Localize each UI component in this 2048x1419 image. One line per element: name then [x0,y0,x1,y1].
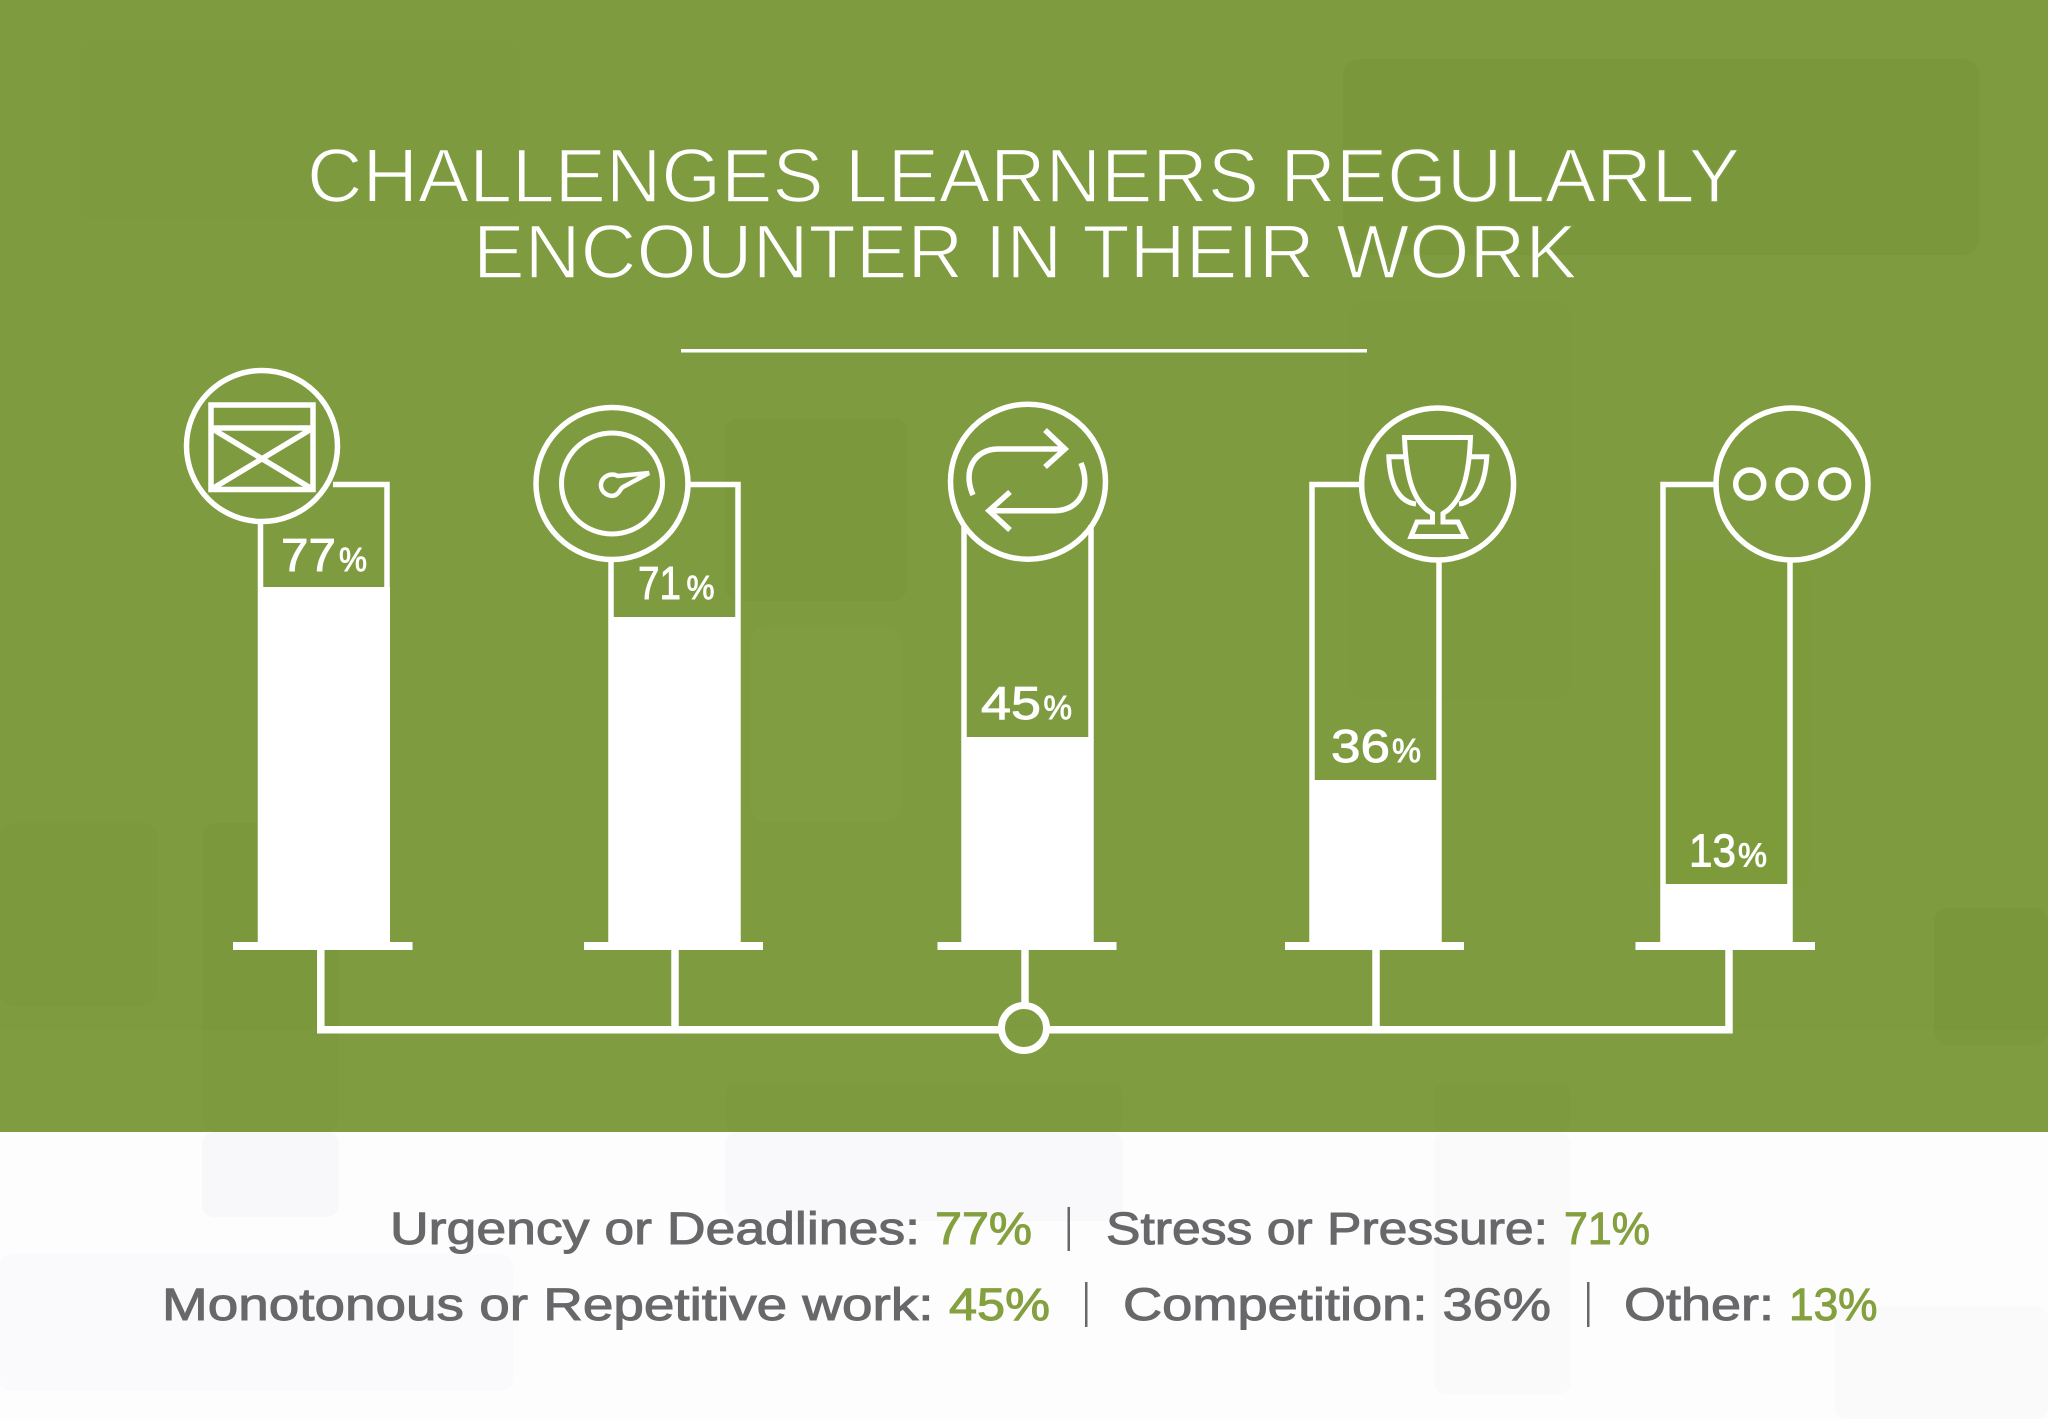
green background panel [0,0,2048,1132]
value: 36%: 36 [1331,720,1390,772]
value: 71% [638,557,714,609]
value: 36% [1331,720,1421,772]
bar: competition 36% [1285,484,1464,950]
icon: three dots [1716,408,1868,560]
legend line 2: Competition: 36% [1123,1279,1551,1330]
connector lines joining the bars [321,950,1729,1030]
legend line 2: Monotonous or Repetitive work: [162,1279,933,1330]
icon: gauge [536,408,688,560]
title divider [681,349,1367,352]
value: 13%: 13 [1689,824,1736,876]
bar: monotonous or repetitive work 45% [938,525,1116,950]
legend line 1: 77% [935,1203,1032,1254]
value: 45%: 45 [981,677,1041,729]
value: 13% [1689,824,1767,876]
value: 13%: % [1738,836,1767,874]
icon: trophy [1362,408,1514,560]
legend line 2 [162,1279,1878,1330]
title [307,134,1740,295]
value: 36%: % [1392,732,1421,769]
value: 77%: 77 [281,529,336,581]
legend line 2: 13% [1789,1279,1878,1330]
legend line 2: Other: [1624,1279,1774,1330]
white background patches [0,1132,2048,1419]
bar: urgency or deadlines 77% [233,484,412,950]
legend line 1: 71% [1564,1203,1650,1254]
title: ENCOUNTER IN THEIR WORK [473,210,1577,295]
value: 71%: 71 [638,557,681,609]
connector hub circle [1002,1006,1046,1050]
bar: stress or pressure 71% [584,484,763,950]
icon: repeat arrows [950,404,1106,559]
value: 71%: % [686,569,714,606]
value: 77%: % [339,541,367,578]
icon: window with crossed box [186,370,338,522]
legend line 2: 45% [949,1279,1050,1330]
value: 45% [981,677,1072,729]
value: 45%: % [1044,689,1072,726]
value: 77% [281,529,367,581]
bar: other 13% [1636,484,1815,950]
legend line 1: Urgency or Deadlines: [390,1203,920,1254]
legend line 1: Stress or Pressure: [1106,1203,1548,1254]
title: CHALLENGES LEARNERS REGULARLY [307,134,1740,219]
legend line 1 [390,1203,1650,1254]
